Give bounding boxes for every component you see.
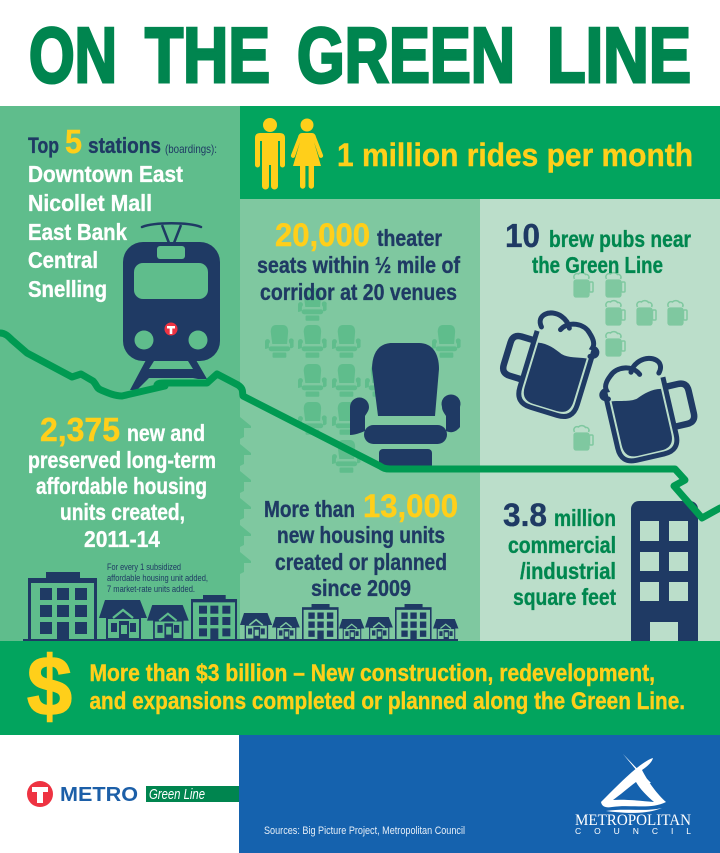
text: top 5 stations: Top bbox=[28, 133, 59, 158]
text: affordable housing: 2,375 bbox=[40, 411, 120, 448]
text: market-rate note bbox=[107, 562, 208, 594]
text: theater seats bbox=[257, 217, 460, 305]
text: commercial space: 3.8 bbox=[503, 497, 547, 533]
text: top 5 stations: (boardings): bbox=[165, 142, 217, 156]
icon: man bbox=[255, 118, 285, 190]
text: theater seats: 20,000 bbox=[275, 217, 370, 253]
logo: Metro Green Line: Green Line bbox=[149, 786, 205, 803]
text: commercial space: commercial bbox=[508, 532, 616, 558]
text: brew pubs: 10 bbox=[505, 217, 540, 254]
title: LINE bbox=[547, 11, 691, 99]
icon: woman bbox=[291, 118, 323, 189]
panel: brew pubs and commercial space bbox=[480, 199, 720, 641]
logo: Metropolitan Council: METROPOLITAN bbox=[575, 812, 691, 829]
logo: Metro Green Line: METRO bbox=[60, 784, 138, 806]
text: new housing units: 13,000 bbox=[363, 488, 458, 524]
banner text: More than $3 billion – New construction, redevelopment, bbox=[90, 660, 655, 687]
text: theater seats: theater bbox=[377, 225, 442, 251]
text: brew pubs bbox=[505, 217, 691, 278]
text: brew pubs: the Green Line bbox=[532, 252, 663, 278]
text: theater seats: corridor at 20 venues bbox=[260, 279, 457, 305]
text: commercial space bbox=[503, 497, 616, 610]
text: new housing units: More than bbox=[264, 496, 355, 522]
icon: dollar sign: $ bbox=[27, 639, 72, 733]
text: top 5 stations: Nicollet Mall bbox=[28, 190, 152, 216]
logo: Metropolitan Council: COUNCIL bbox=[575, 826, 691, 836]
panel: investment banner bbox=[0, 639, 720, 735]
panel: theater seats and housing units bbox=[240, 199, 480, 641]
text: new housing units: created or planned bbox=[275, 549, 447, 575]
text: affordable housing: new and bbox=[127, 420, 205, 446]
text: commercial space: square feet bbox=[513, 584, 616, 610]
text: top 5 stations: Central bbox=[28, 247, 98, 273]
text: market-rate note: 7 market-rate units added. bbox=[107, 584, 195, 594]
title: ON bbox=[29, 11, 117, 99]
icon: right beer mug bbox=[596, 351, 701, 465]
banner text bbox=[90, 660, 685, 715]
icon: left beer mug bbox=[494, 303, 604, 421]
text: commercial space: million bbox=[554, 505, 616, 531]
background mug icons bbox=[574, 273, 687, 450]
text: affordable housing: units created, bbox=[60, 499, 185, 525]
skyline: buildings and houses bbox=[23, 572, 458, 641]
text: market-rate note: affordable housing unit added, bbox=[107, 573, 208, 583]
text: commercial space: /industrial bbox=[520, 558, 616, 584]
text: new housing units: since 2009 bbox=[311, 575, 411, 601]
icon: train bbox=[123, 223, 220, 390]
text: affordable housing: affordable housing bbox=[36, 473, 207, 499]
background seat icons bbox=[265, 288, 461, 473]
text: new housing units bbox=[264, 488, 458, 601]
green line route bbox=[0, 333, 720, 518]
title: GREEN bbox=[297, 11, 515, 99]
text: top 5 stations: East Bank bbox=[28, 219, 127, 245]
text: new housing units: new housing units bbox=[277, 522, 445, 548]
logo: Metropolitan Council bbox=[575, 754, 691, 836]
text: top 5 stations bbox=[28, 123, 217, 302]
text: market-rate note: For every 1 subsidized bbox=[107, 562, 181, 572]
panel: rides per month bbox=[240, 106, 720, 199]
title: THE bbox=[145, 11, 270, 99]
sources: Sources: Big Picture Project, Metropolitan Council bbox=[264, 825, 465, 837]
icon: office building bbox=[631, 501, 698, 641]
text: top 5 stations: 5 bbox=[65, 123, 82, 160]
text: top 5 stations: Snelling bbox=[28, 276, 107, 302]
icon: theater seat bbox=[350, 343, 460, 469]
text: top 5 stations: Downtown East bbox=[28, 161, 183, 187]
text: theater seats: seats within ½ mile of bbox=[257, 252, 460, 278]
panel: stations and affordable housing bbox=[0, 106, 240, 641]
logo: Metro Green Line bbox=[27, 781, 239, 807]
text: affordable housing bbox=[28, 411, 216, 552]
title bbox=[29, 11, 691, 99]
text: top 5 stations: stations bbox=[88, 133, 161, 158]
rides heading: 1 million rides per month bbox=[337, 137, 693, 173]
text: affordable housing: 2011-14 bbox=[84, 526, 160, 552]
text: brew pubs: brew pubs near bbox=[549, 226, 691, 252]
panel: footer bbox=[239, 735, 720, 853]
panel edge: zigzag bbox=[230, 417, 251, 574]
text: affordable housing: preserved long-term bbox=[28, 447, 216, 473]
